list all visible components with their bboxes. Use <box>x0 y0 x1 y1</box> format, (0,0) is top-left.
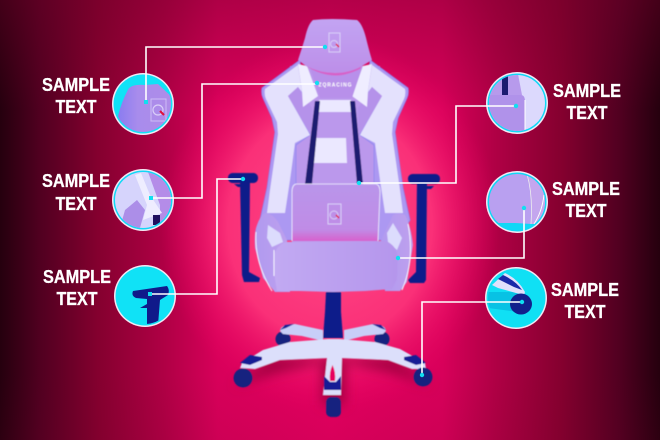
straps <box>305 101 320 184</box>
label: left 1: TEXT <box>56 97 96 117</box>
left bolster <box>255 213 290 292</box>
headrest crease <box>306 66 362 76</box>
seat cushion <box>273 241 398 292</box>
line: armrest <box>150 179 243 294</box>
right armrest <box>408 174 440 283</box>
label: left 3: TEXT <box>56 289 98 309</box>
front base legs <box>240 339 426 395</box>
label: right 1: TEXT <box>566 103 608 123</box>
label: left 2: TEXT <box>56 194 96 214</box>
label: left 3: SAMPLE <box>43 267 111 287</box>
label: right 2: TEXT <box>566 201 606 221</box>
line: headrest <box>146 47 325 102</box>
rear leg tips <box>280 324 386 330</box>
label: right 1: SAMPLE <box>553 81 621 101</box>
circle: headrest detail <box>112 73 175 135</box>
floor shadow <box>234 358 432 405</box>
circle: armrest detail <box>114 265 176 327</box>
circle: seat detail <box>486 171 548 233</box>
backrest centre panel <box>290 66 380 245</box>
line: seat <box>398 208 524 258</box>
right wing <box>352 60 410 240</box>
label: right 3: TEXT <box>564 302 606 322</box>
callout dots <box>144 45 526 377</box>
rear casters <box>276 332 390 346</box>
gas lift <box>323 292 343 338</box>
line: shoulder <box>151 84 317 198</box>
label: right 3: SAMPLE <box>551 280 619 300</box>
label: left 1: SAMPLE <box>42 75 110 95</box>
left armrest <box>228 173 260 282</box>
right bolster <box>381 214 413 291</box>
callout lines <box>146 47 524 375</box>
lumbar pillow <box>292 184 380 241</box>
headrest <box>298 19 372 74</box>
label: left 2: SAMPLE <box>42 171 110 191</box>
circle: shoulder detail <box>112 169 174 231</box>
brand text: ZQRACING <box>318 82 352 88</box>
line: caster <box>422 302 522 375</box>
label: right 2: SAMPLE <box>552 179 620 199</box>
chair <box>228 19 440 417</box>
base opening <box>330 365 335 381</box>
circle: caster detail <box>485 267 547 329</box>
neck panel <box>310 68 362 98</box>
rear base legs <box>280 324 323 341</box>
front casters <box>234 368 432 417</box>
headrest logo <box>329 33 340 52</box>
circle: lumbar pillow detail <box>486 72 548 134</box>
base blue accents <box>240 355 426 390</box>
white stripes <box>312 100 352 163</box>
line: lumbar pillow <box>359 106 516 183</box>
pillow logo <box>328 204 341 224</box>
left wing <box>260 60 318 240</box>
backrest <box>260 60 410 245</box>
